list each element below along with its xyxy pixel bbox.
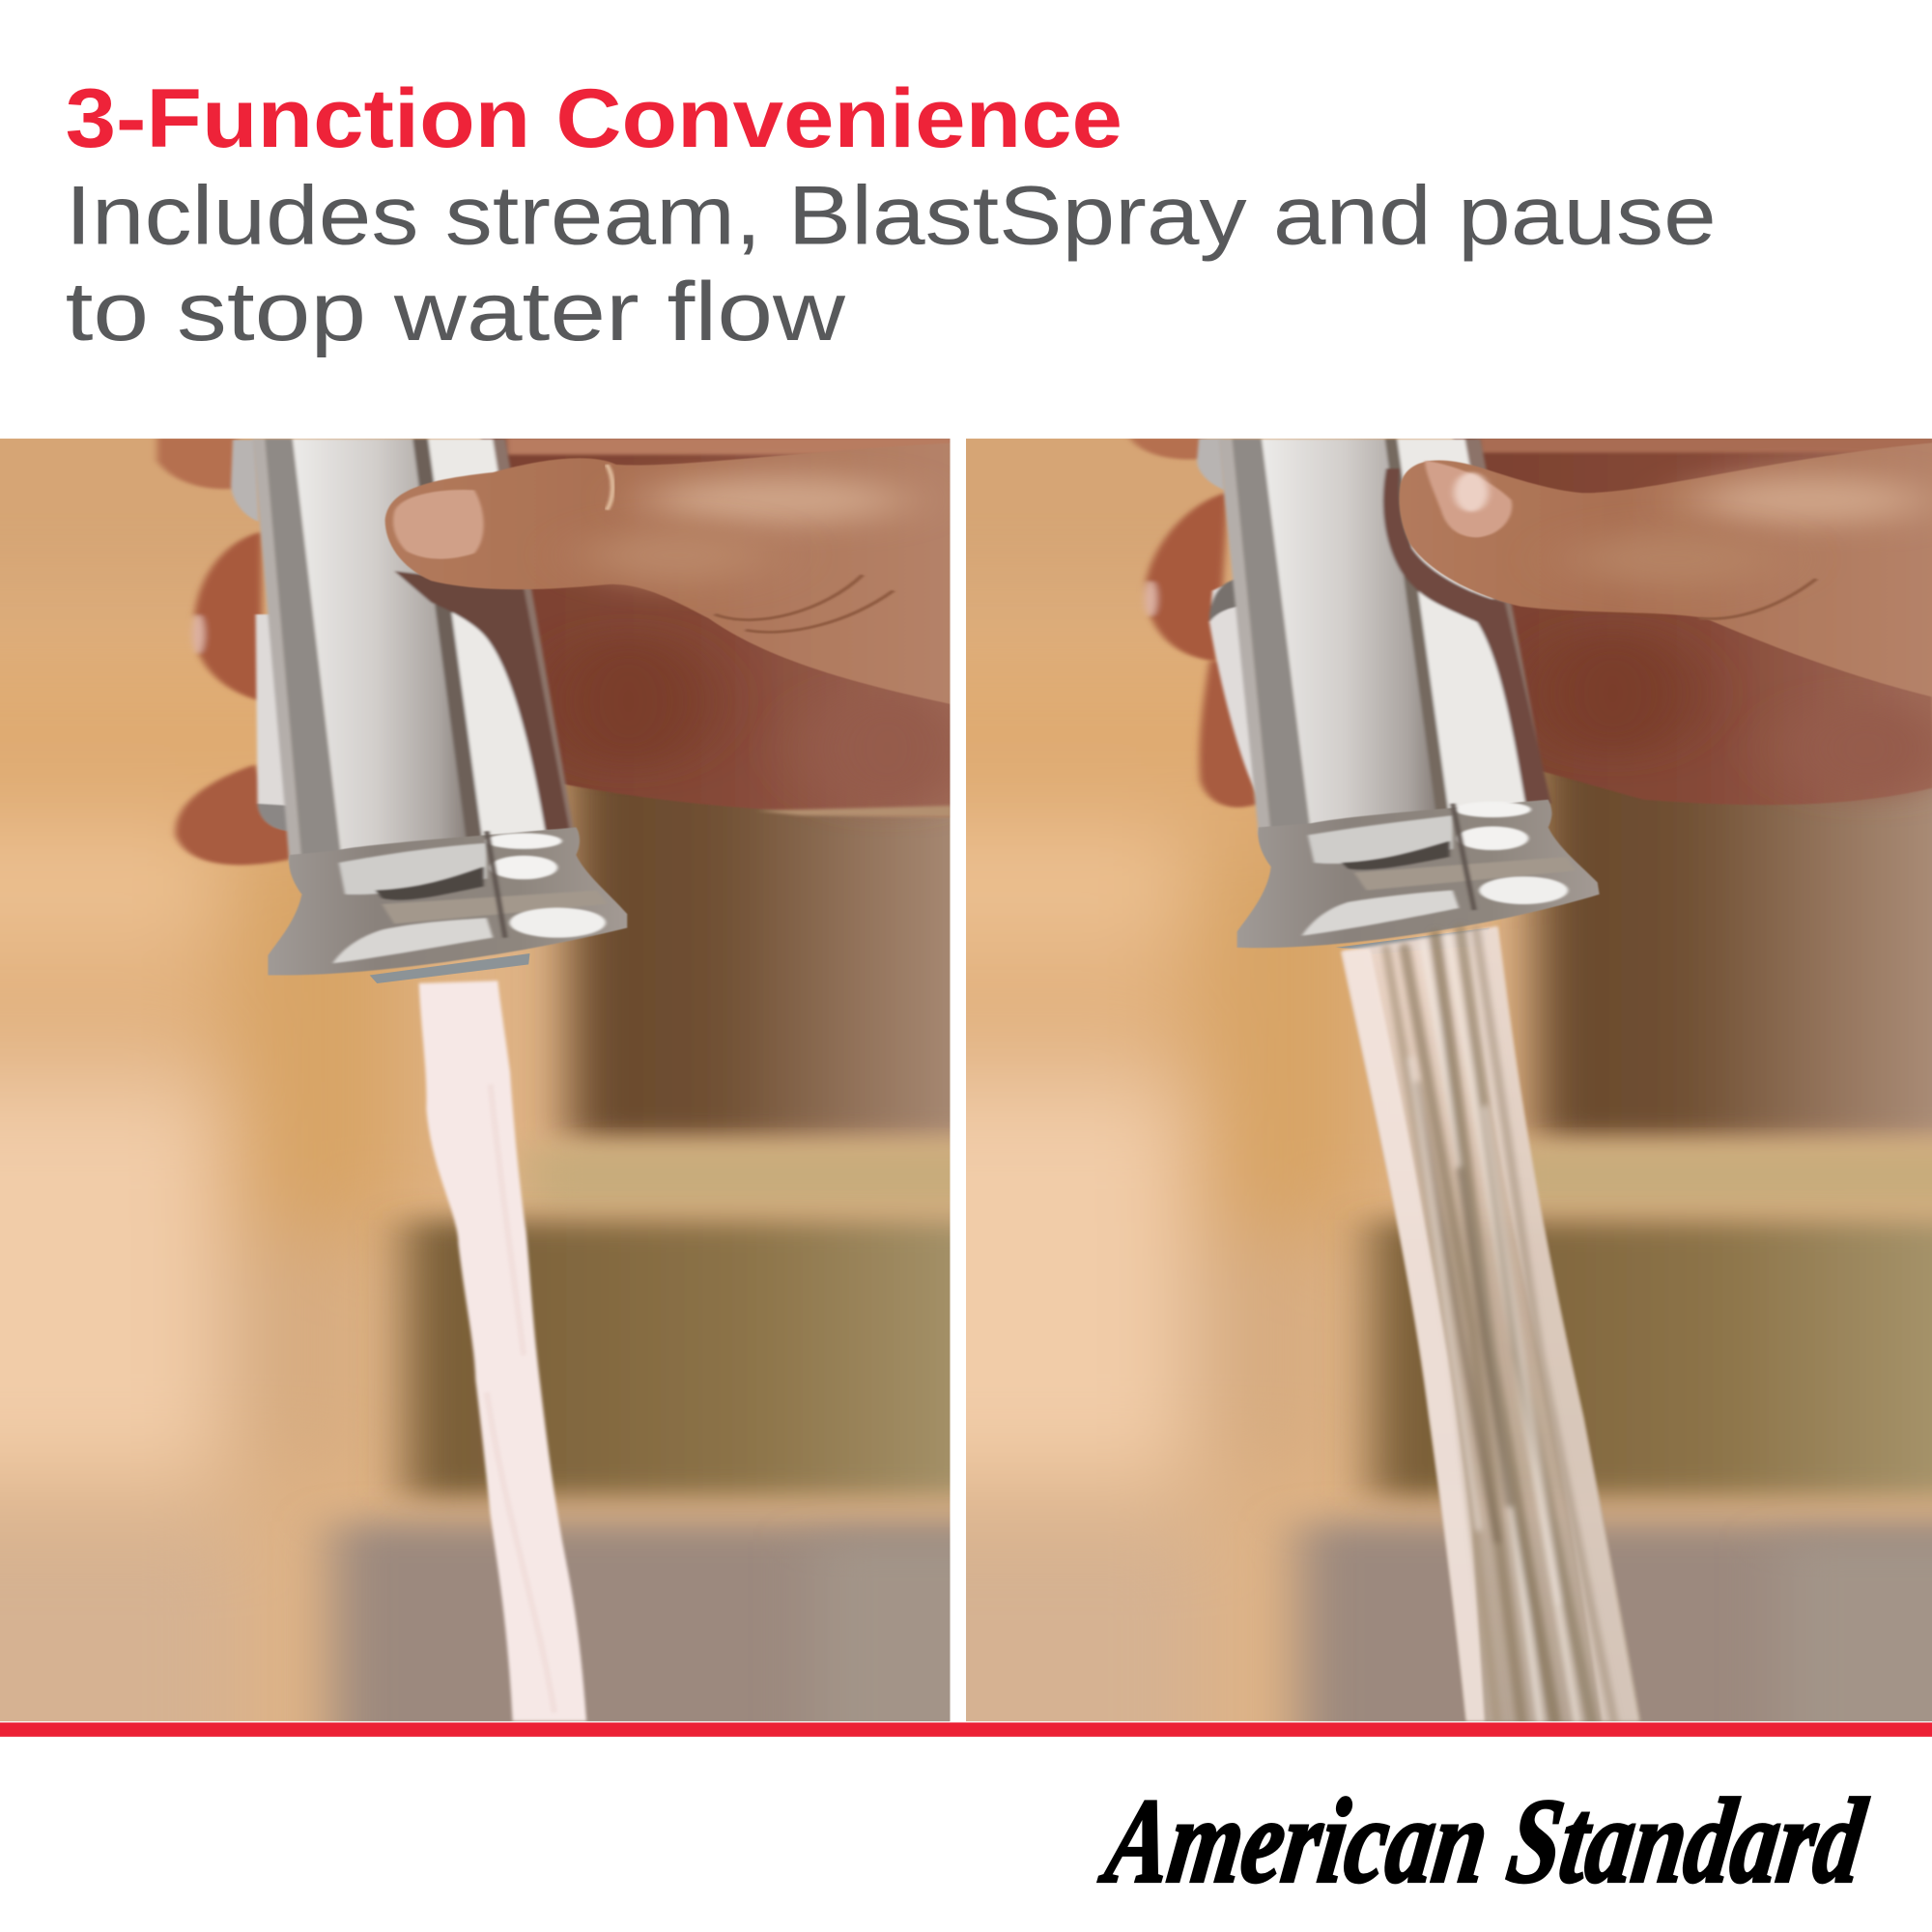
bell flange: [1237, 800, 1600, 948]
description text: to stop water flow: [66, 265, 845, 358]
hand and sprayer, spray mode: [1129, 437, 1932, 954]
chrome sprayer body: [252, 439, 576, 863]
red divider bar: [0, 1722, 1932, 1737]
blurred kitchen background: [966, 439, 1932, 1721]
palm: [1453, 437, 1932, 805]
fingers behind sprayer: [1129, 437, 1259, 808]
trigger buttons: [1197, 439, 1262, 800]
water spray: [1341, 926, 1641, 1721]
trigger buttons: [231, 440, 295, 831]
thumb: [1399, 442, 1932, 697]
blurred kitchen background: [0, 439, 951, 1721]
thumb: [385, 442, 955, 705]
panel: BlastSpray photo: [966, 439, 1932, 1721]
description text: Includes stream, BlastSpray and pause: [66, 169, 1717, 263]
fingers behind sprayer: [157, 437, 293, 865]
bell flange: [268, 827, 627, 976]
hand and sprayer, stream mode: [157, 437, 967, 983]
aerator: [370, 953, 529, 983]
panel: stream photo: [0, 439, 951, 1721]
water stream: [419, 980, 586, 1721]
title: 3-Function Convenience: [66, 71, 1122, 165]
chrome sprayer body: [1218, 439, 1551, 836]
palm: [480, 437, 967, 817]
aerator: [1336, 927, 1490, 949]
description text: [66, 169, 1717, 358]
